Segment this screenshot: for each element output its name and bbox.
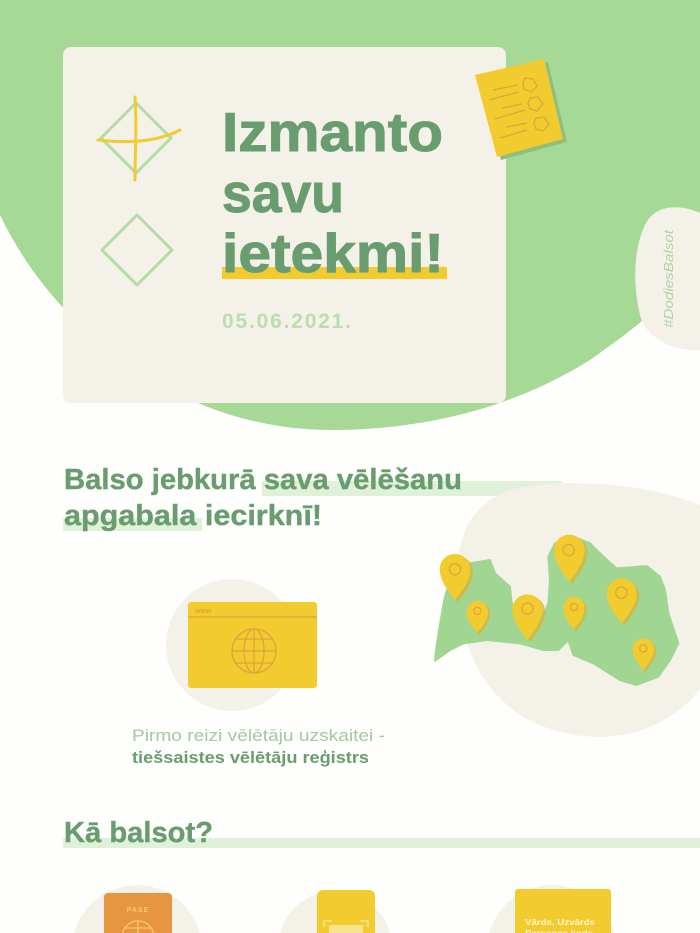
- heading: vote at any polling station: apgabala iecirknī!: [64, 500, 322, 532]
- text: first-time voter registration: Pirmo reizi vēlētāju uzskaitei -: [132, 727, 385, 745]
- heading highlight strips: [63, 481, 562, 531]
- heading: vote at any polling station: [64, 464, 462, 532]
- green hero background shape: [0, 0, 700, 430]
- map pins: [440, 535, 656, 672]
- heading highlight strip: [63, 838, 700, 848]
- hashtag blob: [635, 207, 700, 350]
- text: first-time voter registration: [132, 727, 385, 767]
- heading: how to vote: Kā balsot?: [64, 817, 213, 849]
- icon: online voter register window: www: [194, 608, 212, 615]
- date: 05.06.2021.: [222, 310, 351, 333]
- title: [222, 101, 444, 284]
- icon: voter details card: Vārds, Uzvārds: [525, 917, 595, 927]
- icon: marked ballot diamond: [98, 97, 180, 180]
- icon: passport: PASE: [127, 907, 149, 914]
- title: ietekmi!: [222, 222, 444, 284]
- hashtag text: #DodiesBalsot: [661, 228, 676, 328]
- icon: voter details card: [489, 885, 615, 933]
- icon: passport: [74, 885, 200, 933]
- icon: empty ballot diamond: [102, 215, 172, 285]
- icon: ID card: [280, 890, 390, 933]
- icon: online voter register window: [166, 579, 317, 711]
- map shape: [435, 537, 678, 685]
- title: savu: [222, 162, 344, 224]
- map of Latvia with pins: [435, 535, 678, 685]
- heading: vote at any polling station: Balso jebkurā sava vēlēšanu: [64, 464, 462, 496]
- title: Izmanto: [222, 101, 443, 163]
- panel: hero card: [63, 47, 506, 403]
- title highlight: [222, 267, 447, 279]
- icon: yellow checklist note: [475, 59, 567, 160]
- map background blob: [458, 483, 700, 737]
- text: first-time voter registration: tiešsaistes vēlētāju reģistrs: [132, 749, 369, 767]
